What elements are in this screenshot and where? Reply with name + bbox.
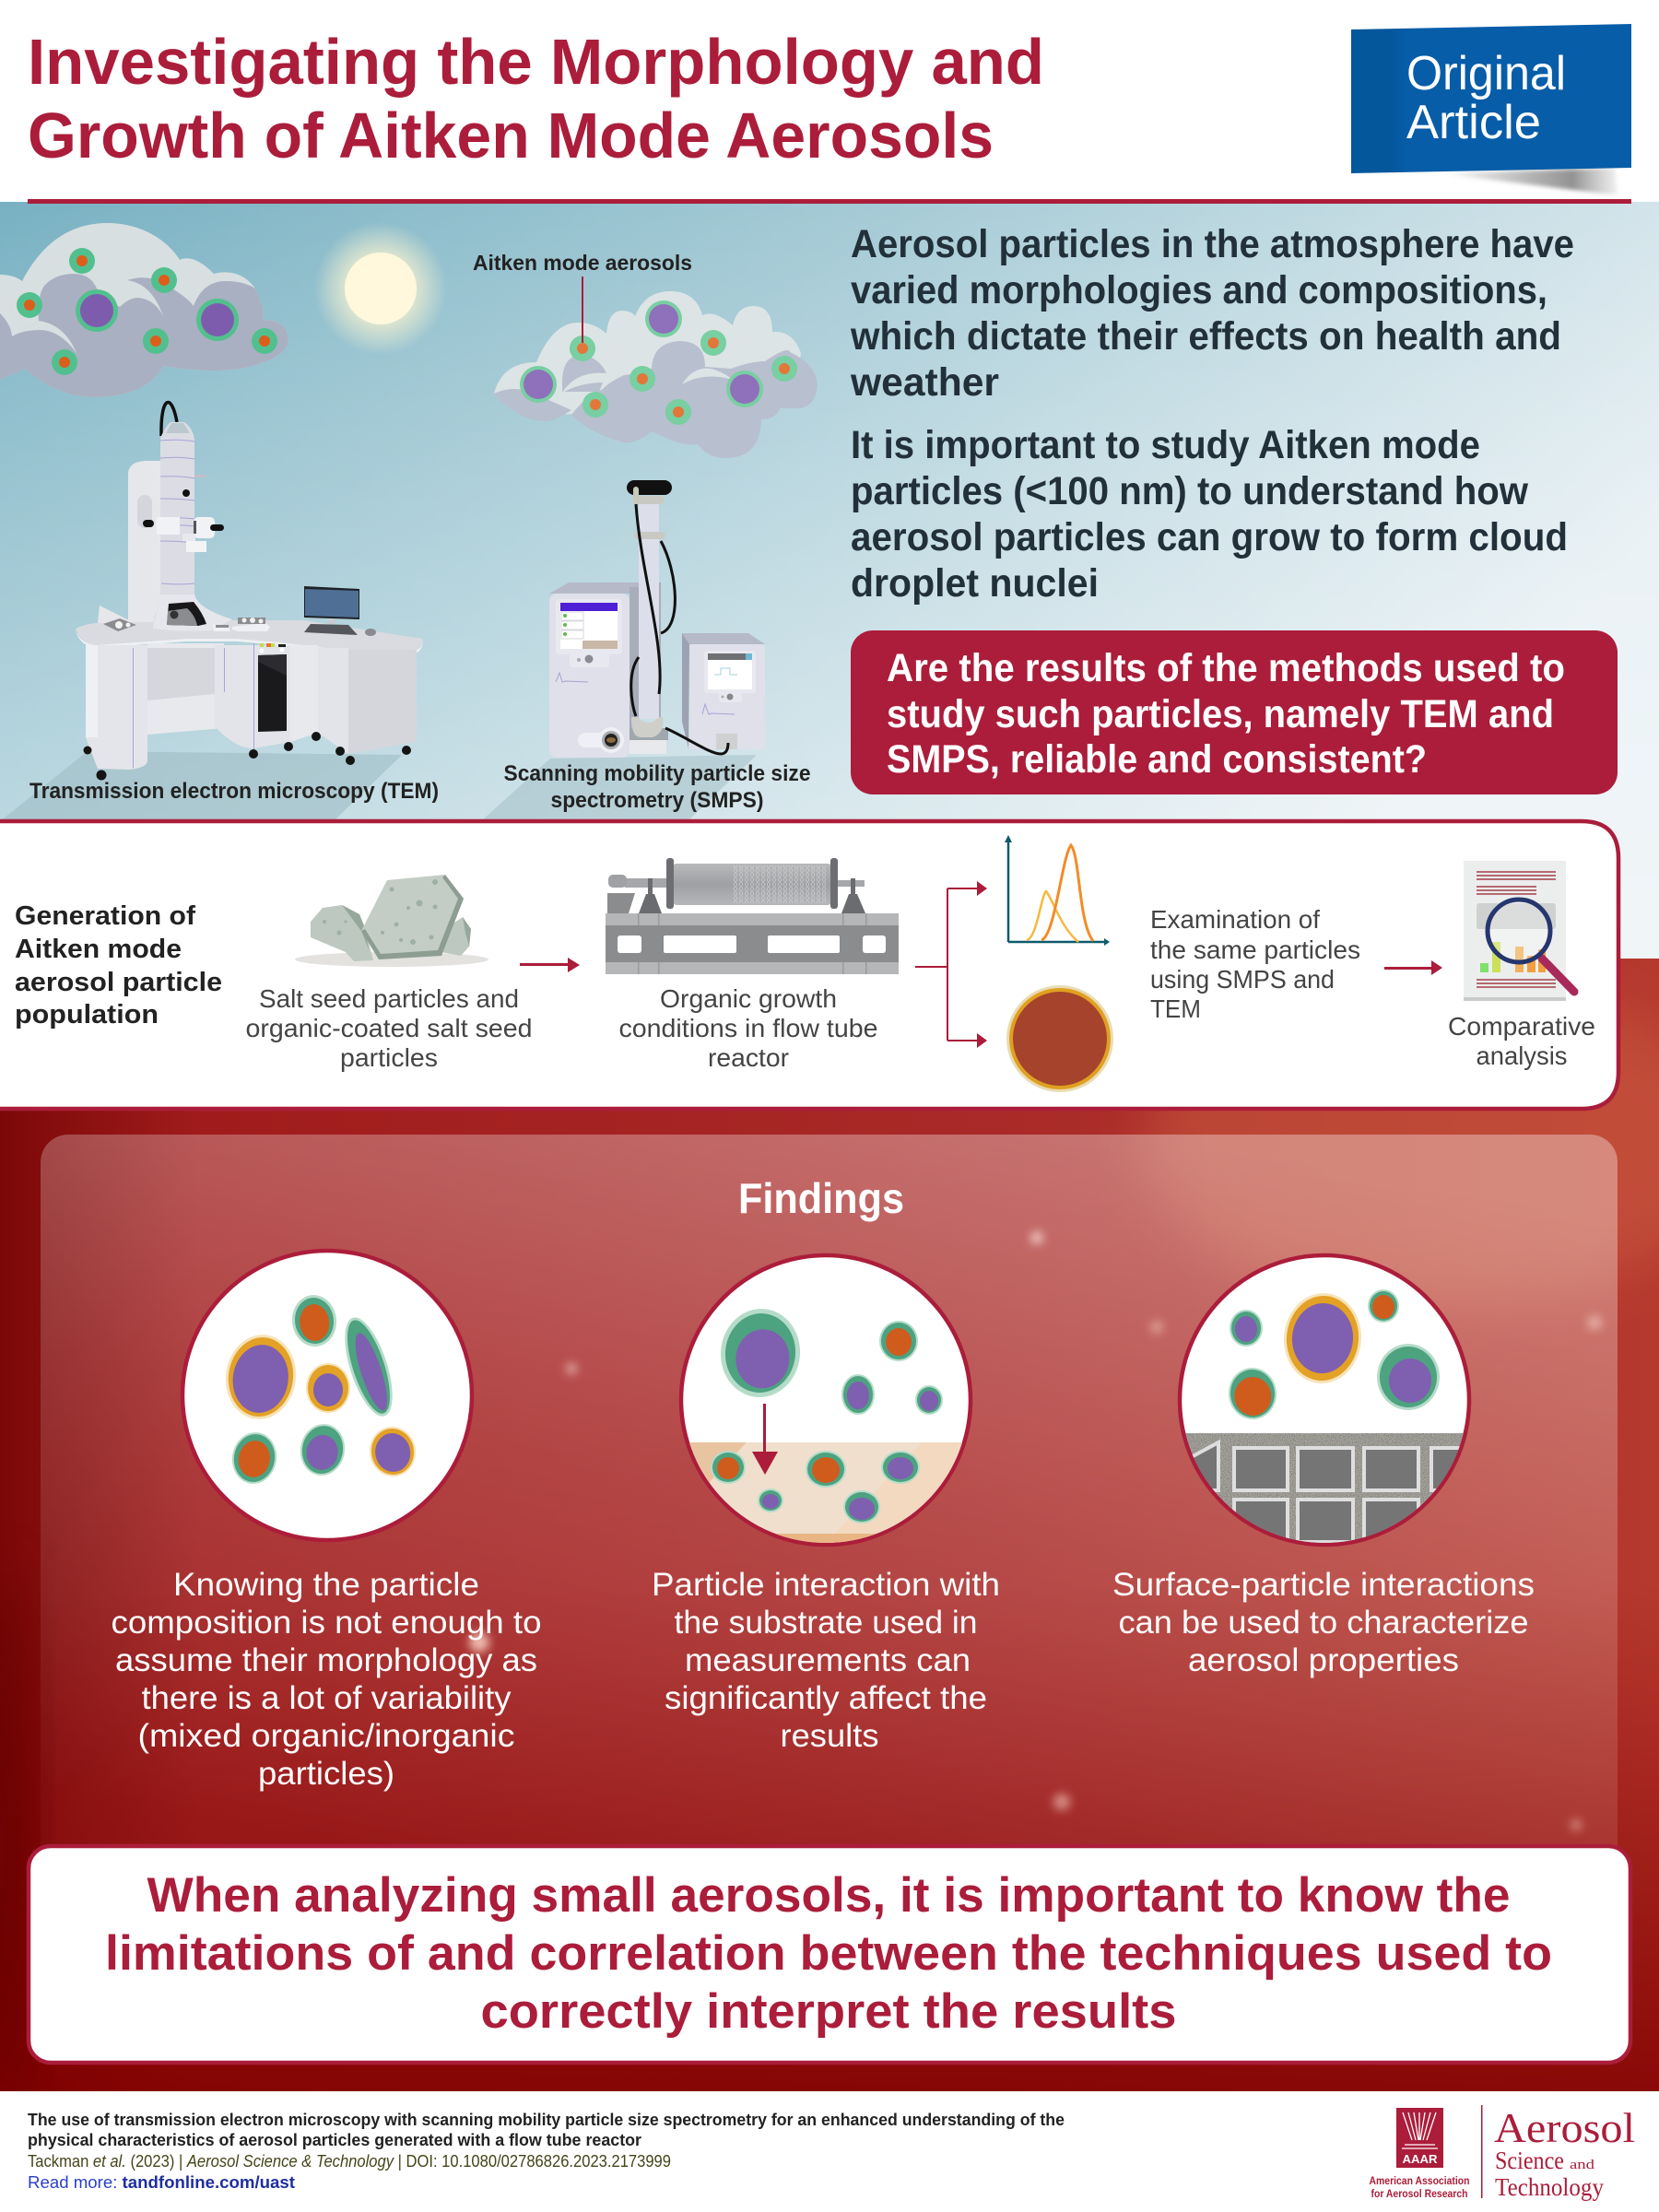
research question callout bbox=[851, 630, 1618, 794]
AAAR logo: AAAR bbox=[1403, 2152, 1438, 2166]
intro text block: droplet nuclei bbox=[851, 561, 1099, 606]
text: organic growth: Organic growth bbox=[660, 984, 837, 1013]
arrow: examination to analysis bbox=[1384, 960, 1442, 975]
intro text block: weather bbox=[850, 360, 999, 405]
image: TEM grid sample bbox=[1006, 985, 1113, 1092]
finding 2 text: results bbox=[780, 1718, 879, 1754]
title: Investigating the Morphology and bbox=[28, 26, 1044, 98]
arrows: split to SMPS and TEM bbox=[915, 881, 987, 1048]
finding 3 illustration: surface interaction bbox=[1180, 1255, 1475, 1548]
original article ribbon badge: Article bbox=[1406, 96, 1541, 149]
finding 1 text: assume their morphology as bbox=[115, 1642, 537, 1678]
journal logo: Aerosol Science and Technology: Science bbox=[1495, 2147, 1564, 2174]
TEM microscope illustration bbox=[76, 403, 423, 780]
SMPS instrument illustration bbox=[549, 480, 765, 758]
finding 2 text: Particle interaction with bbox=[652, 1567, 1000, 1603]
text: salt seed particles: organic-coated salt seed bbox=[245, 1014, 533, 1042]
sun bbox=[314, 222, 447, 355]
workflow heading: Aitken mode bbox=[15, 935, 182, 964]
text: comparative analysis: Comparative bbox=[1448, 1012, 1595, 1041]
finding 2 text: measurements can bbox=[685, 1642, 971, 1678]
instrument labels: Scanning mobility particle size bbox=[503, 761, 811, 786]
finding 1 illustration: varied morphology bbox=[182, 1251, 472, 1540]
panel: findings bbox=[41, 1135, 1618, 1872]
intro text block: which dictate their effects on health and bbox=[850, 314, 1561, 359]
conclusion box: When analyzing small aerosols, it is important to know the bbox=[147, 1868, 1510, 1923]
title bbox=[28, 26, 1044, 171]
finding 1 text: Knowing the particle bbox=[173, 1567, 479, 1603]
citation text: Read more: tandfonline.com/uast bbox=[28, 2173, 295, 2192]
journal logo: Aerosol Science and Technology: Technology bbox=[1495, 2173, 1604, 2201]
instrument labels: spectrometry (SMPS) bbox=[551, 788, 763, 813]
findings heading: Findings bbox=[738, 1174, 904, 1222]
conclusion box: correctly interpret the results bbox=[481, 1984, 1176, 2039]
workflow heading: Generation of bbox=[15, 901, 195, 931]
text: examination bbox=[1150, 905, 1360, 1023]
finding 3 text: can be used to characterize bbox=[1119, 1605, 1528, 1641]
finding 1 text: composition is not enough to bbox=[111, 1605, 542, 1641]
conclusion box: limitations of and correlation between the techniques used to bbox=[105, 1926, 1552, 1981]
text: organic growth: reactor bbox=[708, 1043, 789, 1072]
icon: report with magnifier bbox=[1464, 861, 1574, 1001]
finding 1 text: particles) bbox=[258, 1756, 394, 1792]
finding 2 text bbox=[652, 1567, 1000, 1754]
icon: salt seed particles bbox=[295, 875, 488, 967]
instrument labels: Transmission electron microscopy (TEM) bbox=[29, 779, 439, 804]
finding 1 text: (mixed organic/inorganic bbox=[138, 1718, 514, 1754]
workflow heading: aerosol particle bbox=[15, 968, 222, 997]
text: comparative analysis: analysis bbox=[1477, 1041, 1567, 1070]
text: salt seed particles: particles bbox=[340, 1043, 438, 1072]
icon: flow tube reactor bbox=[606, 858, 899, 974]
finding 1 text bbox=[111, 1567, 542, 1792]
text: organic growth: conditions in flow tube bbox=[619, 1014, 877, 1042]
AAAR logo: American Association bbox=[1370, 2174, 1469, 2187]
finding 2 illustration: substrate interaction bbox=[681, 1255, 977, 1553]
intro text block: It is important to study Aitken mode bbox=[851, 423, 1480, 467]
intro text block bbox=[850, 222, 1574, 606]
research question callout: study such particles, namely TEM and bbox=[887, 692, 1554, 736]
AAAR logo bbox=[1370, 2108, 1469, 2200]
original article ribbon badge: Original bbox=[1406, 47, 1566, 100]
intro text block: particles (<100 nm) to understand how bbox=[851, 469, 1529, 513]
original article ribbon badge bbox=[1351, 24, 1631, 195]
label: Aitken mode aerosols with pointer: Aitken mode aerosols bbox=[473, 251, 692, 275]
text: examination: TEM bbox=[1150, 994, 1201, 1023]
intro text block: Aerosol particles in the atmosphere have bbox=[851, 222, 1574, 266]
text: organic growth bbox=[619, 984, 877, 1072]
AAAR logo: for Aerosol Research bbox=[1371, 2187, 1467, 2200]
journal logo: Aerosol Science and Technology bbox=[1481, 2104, 1635, 2201]
research question callout: SMPS, reliable and consistent? bbox=[887, 737, 1427, 782]
footer band bbox=[0, 2091, 1659, 2212]
citation text: The use of transmission electron microscopy with scanning mobility particle size spectrometry for an enhanced understanding of the bbox=[28, 2111, 1065, 2129]
left cloud with particles bbox=[0, 223, 288, 397]
chart: SMPS size distribution bbox=[1005, 835, 1110, 946]
text: salt seed particles bbox=[245, 984, 533, 1072]
text: salt seed particles: Salt seed particles and bbox=[259, 984, 519, 1013]
citation text: physical characteristics of aerosol particles generated with a flow tube reactor bbox=[28, 2131, 641, 2149]
finding 2 text: the substrate used in bbox=[675, 1605, 977, 1641]
panel: particle generation workflow bbox=[0, 821, 1618, 1109]
workflow heading: population bbox=[15, 1000, 159, 1030]
arrow: salt to reactor bbox=[520, 958, 580, 972]
research question callout: Are the results of the methods used to bbox=[887, 646, 1565, 690]
text: comparative analysis bbox=[1448, 1012, 1595, 1070]
intro text block: aerosol particles can grow to form cloud bbox=[851, 515, 1568, 559]
header rule bbox=[28, 199, 1631, 204]
title: Growth of Aitken Mode Aerosols bbox=[28, 100, 994, 171]
finding 1 text: there is a lot of variability bbox=[142, 1680, 512, 1716]
finding 3 text: Surface-particle interactions bbox=[1112, 1567, 1535, 1603]
text: examination: Examination of bbox=[1150, 905, 1320, 934]
intro text block: varied morphologies and compositions, bbox=[851, 268, 1547, 312]
journal logo: Aerosol Science and Technology: and bbox=[1570, 2158, 1595, 2172]
citation text: Tackman et al. (2023) | Aerosol Science & Technology | DOI: 10.1080/02786826.2023.2173999 bbox=[28, 2152, 671, 2171]
finding 2 text: significantly affect the bbox=[665, 1680, 987, 1716]
text: examination: using SMPS and bbox=[1150, 965, 1335, 994]
right cloud with particles bbox=[494, 291, 818, 458]
red textured background bbox=[0, 959, 1659, 2120]
instrument labels bbox=[29, 761, 811, 813]
citation text bbox=[28, 2111, 1065, 2192]
conclusion box bbox=[29, 1846, 1630, 2063]
finding 3 text bbox=[1112, 1567, 1535, 1678]
journal logo: Aerosol Science and Technology: Aerosol bbox=[1494, 2104, 1635, 2151]
finding 3 text: aerosol properties bbox=[1188, 1642, 1459, 1678]
workflow heading bbox=[15, 901, 222, 1030]
sky panel background bbox=[0, 202, 1659, 959]
text: examination: the same particles bbox=[1150, 935, 1360, 964]
